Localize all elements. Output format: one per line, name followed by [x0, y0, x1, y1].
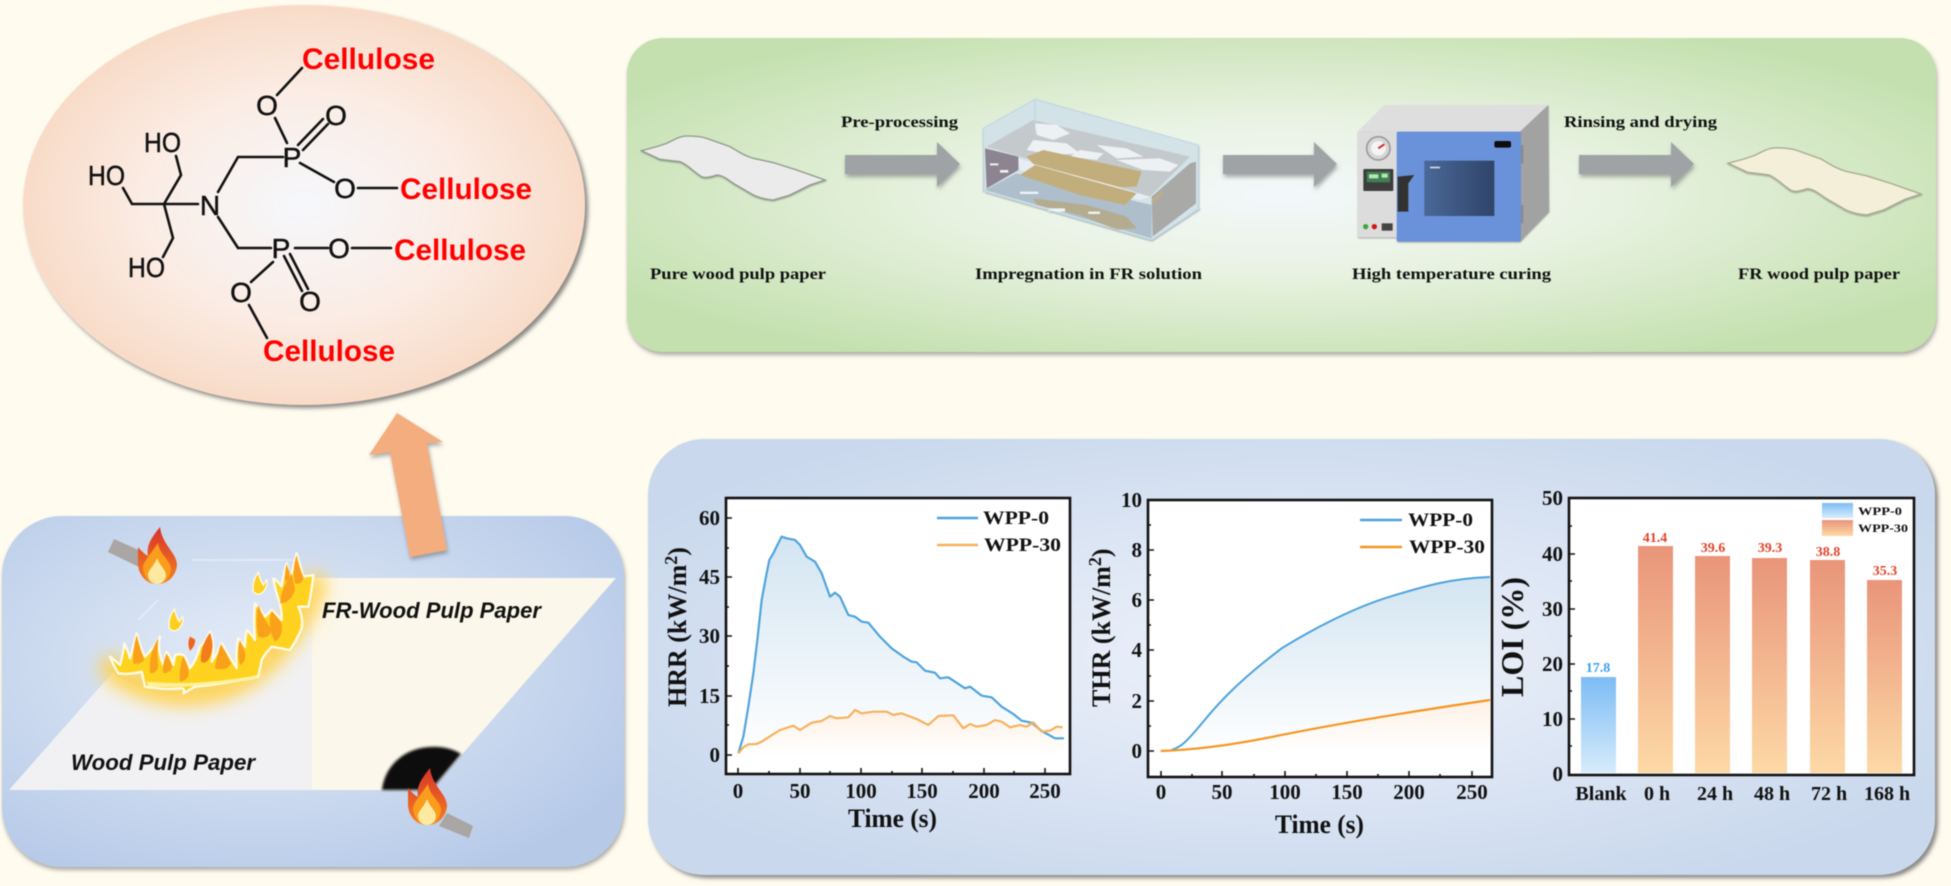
molecule atoms: P [272, 233, 290, 264]
chart: LOI: 50 [1542, 486, 1563, 510]
arrow: pre-processing [845, 142, 960, 187]
THR legend: WPP-30 [1409, 537, 1485, 558]
chart: LOI [1494, 486, 1914, 805]
chart: HRR: HRR (kW/m [663, 565, 692, 707]
burning flames [110, 553, 313, 693]
chart: THR: 0 [1132, 739, 1142, 763]
LOI value labels: 41.4 [1643, 531, 1667, 546]
LOI legend: WPP-0 [1858, 504, 1902, 518]
chart: THR: 250 [1456, 780, 1488, 804]
molecule atoms: HO [88, 160, 125, 191]
cellulose labels [263, 43, 532, 368]
LOI bars [1581, 546, 1902, 773]
HRR legend: WPP-30 [984, 535, 1061, 556]
chart: HRR: 30 [699, 624, 720, 648]
label: FR-wood pulp paper: FR-Wood Pulp Paper [322, 598, 542, 623]
step labels [650, 266, 1900, 283]
chart: LOI: LOI (%) [1494, 577, 1530, 697]
chart: HRR: 0 [710, 743, 720, 767]
chart: THR: 2 [1085, 557, 1105, 566]
chart: HRR: 250 [1029, 779, 1061, 803]
molecule atoms: HO [128, 252, 165, 283]
molecule atoms: O [328, 233, 350, 264]
cellulose labels: Cellulose [400, 173, 532, 206]
pure wood pulp paper [642, 136, 825, 200]
HRR legend [937, 508, 1061, 556]
THR legend: WPP-0 [1408, 510, 1473, 531]
fire glow [112, 585, 314, 693]
cellulose labels: Cellulose [394, 234, 526, 267]
label: wood pulp paper: Wood Pulp Paper [71, 750, 256, 775]
chart: THR: 150 [1331, 780, 1363, 804]
LOI legend: WPP-30 [1858, 521, 1908, 535]
chart: HRR: 0 [733, 779, 743, 803]
molecule atoms [88, 90, 356, 317]
impregnation tank [983, 99, 1200, 240]
chart: LOI: 30 [1542, 597, 1563, 621]
LOI value labels [1586, 531, 1897, 676]
step labels: Impregnation in FR solution [975, 266, 1202, 283]
chart: THR: 0 [1156, 780, 1166, 804]
chart: THR: ) [1087, 548, 1116, 557]
LOI value labels: 39.6 [1701, 541, 1725, 556]
panel: test results [648, 439, 1935, 875]
FR paper sheet [312, 578, 616, 790]
chart: HRR: 100 [845, 779, 877, 803]
arrow: up to structure [369, 413, 447, 557]
step labels: High temperature curing [1352, 266, 1551, 283]
molecule atoms: O [334, 173, 356, 204]
chart: THR [1085, 488, 1492, 839]
burnt paper residue [138, 560, 295, 620]
chart: LOI: 0 [1552, 762, 1563, 786]
step labels: Pure wood pulp paper [650, 266, 826, 283]
LOI value labels: 35.3 [1873, 564, 1897, 579]
panel: chemical structure [23, 5, 585, 405]
arrow: rinsing and drying [1579, 142, 1694, 187]
chart: HRR: 60 [699, 506, 720, 530]
chart: HRR [661, 498, 1070, 833]
chart: HRR: 15 [699, 684, 720, 708]
chart: THR: THR (kW/m [1087, 566, 1116, 707]
chart: THR: 10 [1121, 488, 1142, 512]
oven [1358, 105, 1549, 242]
chart: THR: 8 [1132, 538, 1142, 562]
char mark [382, 747, 461, 790]
molecule atoms: N [200, 190, 220, 221]
FR wood pulp paper [1728, 148, 1921, 215]
molecule bonds [123, 68, 397, 338]
chart: THR: 50 [1212, 780, 1232, 804]
chart: LOI: 24 h [1697, 783, 1733, 805]
molecule atoms: O [256, 90, 278, 121]
THR curves [1161, 577, 1490, 751]
chart: HRR: 45 [699, 565, 720, 589]
chart: HRR: 200 [968, 779, 1000, 803]
HRR curves [738, 537, 1064, 755]
chart: THR: 200 [1393, 780, 1425, 804]
chart: THR: 4 [1132, 638, 1142, 662]
chart: LOI: 20 [1542, 652, 1563, 676]
chart: HRR: 2 [661, 556, 681, 565]
chart: LOI: Blank [1575, 783, 1627, 805]
LOI value labels: 17.8 [1586, 661, 1610, 676]
chart: THR: Time (s) [1275, 810, 1364, 839]
LOI value labels: 38.8 [1816, 545, 1840, 560]
molecule atoms: O [325, 100, 347, 131]
chart: THR: 100 [1269, 780, 1301, 804]
LOI legend [1822, 503, 1908, 536]
chart: LOI: 40 [1542, 542, 1563, 566]
step labels: FR wood pulp paper [1738, 266, 1900, 283]
chart: LOI: 168 h [1864, 783, 1910, 805]
cellulose labels: Cellulose [263, 335, 395, 368]
HRR legend: WPP-0 [983, 508, 1049, 529]
chart: HRR: Time (s) [848, 804, 937, 833]
label: pre-processing: Pre-processing [841, 114, 958, 131]
panel: burning comparison [2, 516, 624, 867]
igniter: top [108, 527, 177, 584]
chart: LOI: 48 h [1754, 783, 1790, 805]
molecule atoms: O [299, 286, 321, 317]
label: rinsing and drying: Rinsing and drying [1564, 114, 1717, 131]
chart: LOI: 0 h [1644, 783, 1670, 805]
chart: LOI: 72 h [1811, 783, 1847, 805]
molecule atoms: P [283, 142, 301, 173]
chart: HRR: ) [663, 547, 692, 556]
chart: THR: 6 [1132, 588, 1142, 612]
panel: FR paper process [627, 38, 1936, 352]
arrow: to curing [1223, 142, 1337, 187]
THR legend [1360, 510, 1485, 558]
chart: THR: 2 [1132, 689, 1142, 713]
chart: LOI: 10 [1542, 707, 1563, 731]
chart: HRR: 150 [906, 779, 938, 803]
chart: HRR: 50 [790, 779, 810, 803]
igniter: bottom [408, 768, 473, 838]
cellulose labels: Cellulose [302, 43, 435, 76]
LOI value labels: 39.3 [1758, 541, 1782, 556]
molecule atoms: O [230, 277, 252, 308]
molecule atoms: HO [144, 127, 181, 158]
wood pulp paper sheet [9, 590, 312, 790]
